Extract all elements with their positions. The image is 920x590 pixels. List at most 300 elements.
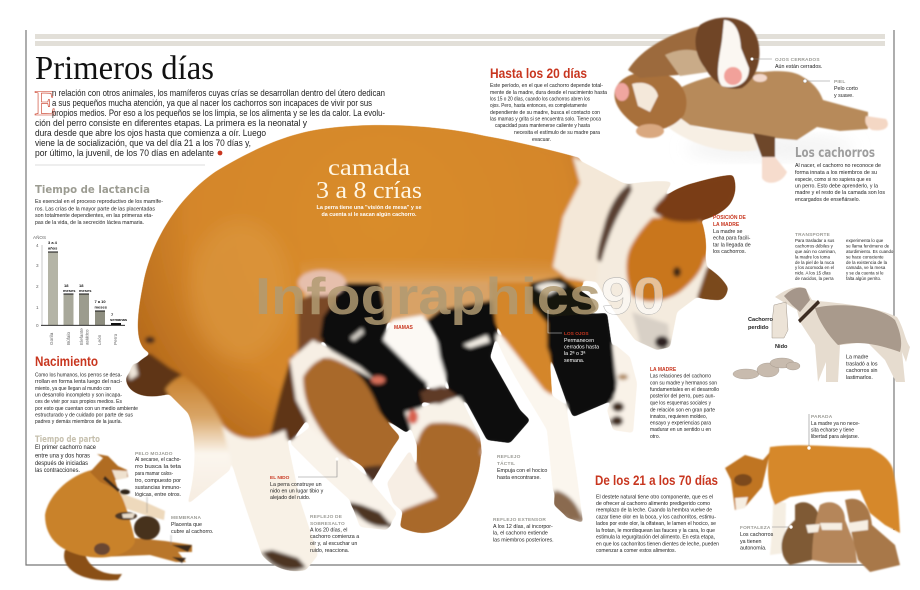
callout: parada: PARADA [811, 414, 833, 420]
end bullet [218, 151, 222, 155]
newborn pup [134, 516, 160, 540]
panel: los cachorros [795, 146, 885, 203]
text column 1: y los acomoda en el [795, 265, 834, 270]
left hind paw [262, 550, 306, 570]
bar chart: Gorila [49, 332, 54, 345]
description [650, 374, 719, 440]
description: forma innata a los miembros de su [795, 170, 877, 176]
description: son totalmente dependientes, en las primeras eta- [35, 213, 153, 219]
second pup [115, 512, 137, 520]
callout: los ojos: semana. [564, 358, 584, 364]
callout: reflejo de sobresalto: cachorro comienza a [310, 534, 359, 540]
description: necesita el estímulo de su madre para [514, 130, 600, 136]
bar chart: 3 [36, 263, 39, 268]
pale shoulder [665, 50, 708, 76]
description: ojos. Pero, hasta entonces, es completamente [490, 103, 587, 109]
text column 1: nido. A los 15 días [795, 270, 831, 276]
callout: reflejo tactil: REFLEJO [497, 454, 521, 460]
bar chart: 4 [36, 243, 39, 248]
text column 2 [846, 238, 894, 281]
body [45, 470, 135, 558]
illustration: two newborn puppies [614, 18, 888, 183]
description: cazar tiene olor en la boca, y los cachorritos, estimu- [596, 514, 716, 520]
description: por esto que cuentan con un medio ambiente [35, 406, 138, 412]
body [138, 125, 590, 443]
anal dark spot [145, 336, 155, 344]
bar chart: Búfalo [66, 332, 71, 345]
dark hip flank [270, 355, 310, 440]
front leg [112, 490, 165, 520]
description: encargados de enseñárselo. [795, 197, 860, 203]
collar [103, 476, 120, 492]
callout: piel: PIEL [834, 79, 845, 85]
callout: fortaleza [740, 525, 793, 552]
pink nose upper [724, 67, 742, 85]
eye [673, 267, 681, 277]
hind paw [865, 116, 888, 130]
description [35, 199, 163, 226]
callout: fortaleza: autonomía. [740, 546, 767, 552]
callout: reflejo tactil: hasta encontrarse. [497, 475, 541, 481]
intro paragraph: ción del perro consiste en diferentes etapas. La primera es la neonatal y [35, 117, 307, 128]
heading: Nacimiento [35, 353, 98, 369]
black puppy right head [530, 277, 597, 323]
callout: los ojos [548, 310, 599, 364]
white pup stripe [122, 513, 135, 518]
callout: posicion de la madre [713, 213, 751, 255]
bar chart: 7 a 10 [94, 299, 106, 304]
bar chart: 18 [79, 283, 84, 288]
description: las contracciones. [35, 467, 80, 474]
text column 1 [795, 238, 836, 281]
bar chart: meses [63, 288, 76, 293]
small paw [753, 74, 767, 82]
text column 2: falta algún perrito. [846, 276, 881, 281]
callout: pelo mojado: lógicas, entre otros. [135, 492, 181, 498]
black puppy right [547, 313, 617, 417]
bar chart: 7 [111, 312, 114, 317]
bar chart: 2 [36, 284, 39, 289]
callout: reflejo extensor: REFLEJO EXTENSOR [493, 517, 546, 523]
callout: reflejo de sobresalto: SOBRESALTO [310, 521, 345, 527]
red nose [408, 410, 418, 424]
text column 2: se hace consciente [846, 254, 884, 260]
callout: parada [807, 414, 860, 450]
description: Es esencial en el proceso reproductivo de los mamífe- [35, 199, 163, 205]
rear limb with white tuft [165, 370, 232, 505]
description: pas de la vida, de la secreción láctea mamaria. [35, 220, 144, 226]
description: un desarrollo incompleto y son incapa- [35, 392, 122, 398]
soft hip highlight [190, 220, 290, 360]
description: estructurado y de cuidado por parte de sus [35, 412, 133, 418]
dark head shade [734, 474, 752, 486]
callout: reflejo de sobresalto: ruido, reacciona. [310, 548, 349, 554]
text column 2: y se da cuenta si le [846, 270, 884, 276]
description: madre y el resto de la camada son los [795, 190, 885, 196]
callout: piel: y suave. [834, 93, 854, 99]
description: ces de vivir por sus propios medios. Es [35, 399, 122, 405]
heading: LA MADRE [650, 367, 677, 373]
description: Este período, en el que el cachorro depende total- [490, 83, 603, 89]
muzzle [735, 497, 748, 510]
callout: reflejo extensor: la, el cachorro extiende [493, 530, 548, 536]
description: miento, ya que llegan al mundo con [35, 386, 111, 392]
description: estimula la regurgitación del alimento. En esta etapa, [596, 534, 715, 540]
big number callout: camada: camada [328, 155, 410, 180]
front paw B [611, 402, 624, 426]
label: cachorro perdido: Cachorro [748, 317, 773, 323]
callout: posicion de la madre: POSICIÓN DE [713, 213, 746, 221]
description: El primer cachorro nace [35, 444, 96, 451]
intro paragraph: dura desde que abre los ojos hasta que comienza a oír. Luego [35, 127, 266, 138]
callout: reflejo de sobresalto: A los 20 días, el [310, 528, 347, 534]
tail [126, 345, 212, 396]
divider [35, 164, 205, 166]
gray dog silhouette [775, 287, 910, 382]
caption: cachorros sin [846, 368, 878, 374]
description: capacidad para mantenerse caliente y hasta [495, 123, 590, 129]
text column 1: de la piel de la nuca [795, 260, 835, 265]
callout: ojos cerrados: OJOS CERRADOS [775, 57, 820, 63]
callout: pelo mojado: rro busca la teta [135, 464, 181, 470]
callout: reflejo tactil: Empuja con el hocico [497, 468, 547, 474]
callout: los ojos: la 2ª o 3ª [564, 351, 585, 357]
bar chart: semanas [110, 317, 128, 322]
intro paragraph: n relación con otros animales, los mamíferos cuyas crías se desarrollan dentro del útero dedican [52, 87, 385, 98]
callout: los ojos: cerrados hasta [564, 344, 599, 350]
big number callout: camada: La perra tiene una "visión de mesa" y se [316, 205, 422, 211]
description: después de iniciadas [35, 460, 88, 467]
description: lados por este olor, la olfatean, le lamen el hocico, se [596, 521, 716, 527]
bar chart: asiático [84, 329, 90, 345]
tan fur behind pups [380, 283, 500, 323]
big number callout: camada [316, 155, 422, 218]
bar chart: años [48, 246, 58, 250]
description: con su madre y hermanos son [650, 380, 717, 386]
description: en que los cachorritos tienen dientes de leche, pueden [596, 542, 719, 548]
tail snout-like patch [129, 362, 138, 380]
upper ear [653, 175, 735, 222]
left white hind leg [222, 425, 318, 571]
callout: membrana: Placenta que [171, 522, 202, 528]
head [725, 452, 770, 510]
text column 1: la madre los toma [795, 254, 830, 260]
big number callout: camada: da cuenta si le sacan algún cachorro. [322, 212, 417, 218]
tail [64, 548, 122, 580]
dark leg [753, 133, 775, 157]
description: mente de la madre, dura desde el nacimiento hasta [490, 90, 607, 96]
callout: piel: Pelo corto [834, 86, 858, 92]
callout: posicion de la madre: echa para facili- [713, 236, 751, 242]
heading: TRANSPORTE [795, 232, 831, 238]
callout: el nido: alejado del ruido. [270, 495, 310, 501]
heading: Tiempo de parto [35, 435, 100, 445]
text column 2: camada, ve la mesa [846, 265, 886, 270]
callout: posicion de la madre: La madre se [713, 229, 742, 235]
pale belly [300, 251, 560, 300]
white foot [762, 157, 787, 183]
callout: el nido [270, 457, 339, 501]
pup right [845, 499, 900, 572]
intro paragraph: propios medios. Por eso a los pequeños se los limpia, se los alimenta y se les da calor. La evolu- [52, 107, 385, 118]
lower pup head [614, 72, 687, 130]
white forehead [535, 282, 565, 295]
callout: pelo mojado: sustancias inmuno- [135, 485, 181, 491]
bar chart: Elefante [79, 328, 84, 345]
text column 1: de nacidos, la perra [795, 276, 834, 281]
drop cap: E [34, 83, 56, 123]
description: otro. [650, 434, 660, 440]
pink paw [371, 376, 385, 384]
description: Como los humanos, los perros se desa- [35, 372, 122, 378]
description: las mamas y grita si se encuentra solo. Tiene poca [490, 116, 601, 122]
bar chart: 1 [36, 305, 39, 310]
body [768, 445, 900, 533]
collar [597, 184, 632, 262]
pink teat area [298, 270, 346, 296]
upper pup body [628, 25, 722, 78]
caption: trasladó a los [846, 362, 878, 368]
description: evacuar. [532, 137, 551, 143]
second front leg [607, 343, 637, 433]
description: la frotan, le mordisquean las fauces y la cara, lo que [596, 528, 715, 534]
callout: membrana [171, 515, 213, 535]
callout: membrana: cubre al cachorro. [171, 529, 213, 535]
label: cachorro perdido [748, 317, 773, 331]
callout: ojos cerrados [750, 57, 822, 70]
description: rrollan en forma lenta luego del naci- [35, 379, 122, 385]
intro paragraph: a sus pequeños mucha atención, ya que al nacer los cachorros son incapaces de vivir por sus [52, 97, 372, 108]
white stripe centre pup [463, 335, 490, 348]
callout: fortaleza: Los cachorros [740, 532, 774, 538]
title: Primeros días [35, 50, 214, 87]
description [35, 444, 96, 474]
big number callout: camada: 3 a 8 crías [316, 178, 422, 204]
description [795, 163, 885, 203]
bar chart: Perro [113, 333, 118, 345]
callout: pelo mojado: para mamar calos- [135, 471, 173, 477]
white chest bands [806, 520, 868, 533]
callout: reflejo extensor: A los 12 días, al incorpor- [493, 524, 553, 530]
text column 1: Para trasladar a sus [795, 238, 835, 243]
neck and head [90, 454, 128, 490]
bar chart: 3 a 4 [48, 240, 58, 245]
panel: tiempo de parto [35, 435, 100, 474]
dark fur behind left pup [298, 285, 338, 362]
callout: parada: sita echarse y tiene [811, 428, 854, 434]
callout: reflejo tactil [497, 454, 547, 481]
dark tail tip [363, 465, 382, 482]
panel: la madre [650, 367, 719, 440]
description: reemplazo de la leche. Cuando la hembra vuelve de [596, 508, 712, 514]
heading: De los 21 a los 70 días [595, 472, 718, 488]
callout: los ojos: Permanecen [564, 338, 594, 344]
callout: pelo mojado: Al secarse, el cacho- [135, 457, 181, 463]
label: cachorro perdido: perdido [748, 325, 769, 331]
description: madurar en un sentido u en [650, 427, 711, 433]
top header bars [35, 34, 885, 46]
taupe saddle [815, 305, 901, 352]
upper pup head [695, 18, 759, 89]
callout: posicion de la madre: LA MADRE [713, 222, 740, 228]
callout: fortaleza: FORTALEZA [740, 525, 771, 531]
second white hind leg [290, 427, 397, 530]
rear paws [172, 545, 192, 563]
text column 1: que aún no caminan, [795, 249, 836, 254]
callout: fortaleza: ya tienen [740, 539, 762, 545]
bar chart: León [97, 334, 102, 345]
callout: reflejo extensor [493, 517, 554, 544]
callout: parada: libertad para alejarse. [811, 434, 859, 440]
bar chart: meses [79, 288, 92, 293]
caption [846, 354, 878, 381]
description: ros. Las crías de la mayor parte de las placentadas [35, 206, 155, 212]
nose [655, 336, 669, 348]
shadow [685, 138, 855, 158]
description: entre una y dos horas [35, 452, 90, 460]
description [596, 494, 719, 554]
description: especie, como si no supiera que es [795, 177, 871, 183]
nest pups [733, 358, 800, 379]
bar chart: 0 [36, 323, 39, 328]
lower pup body [672, 71, 868, 140]
orange front leg [490, 282, 585, 395]
bar chart [33, 234, 128, 345]
callout: reflejo de sobresalto [310, 514, 359, 554]
callout: pelo mojado [135, 451, 181, 498]
description: Al nacer, el cachorro no reconoce de [795, 163, 881, 169]
head shade [784, 288, 810, 312]
pup middle [812, 502, 857, 563]
illustration: dog giving birth [45, 454, 192, 580]
description [35, 372, 138, 425]
black puppy centre [427, 300, 530, 443]
description: ensayo y experiencias para [650, 420, 711, 426]
callout: parada: La madre ya no nece- [811, 421, 860, 427]
lower pup white blaze [632, 83, 658, 112]
white belly between pups [383, 315, 445, 392]
description [490, 83, 607, 143]
callout: los ojos: LOS OJOS [564, 331, 589, 337]
panel: nacimiento [35, 353, 138, 425]
paw brown spot [618, 374, 628, 380]
panel: de los 21 a los 70 dias [595, 472, 719, 554]
text column 2: se llama fenómeno de [846, 244, 890, 248]
callout: ojos cerrados: Aún están cerrados. [775, 64, 822, 70]
heading: Los cachorros [795, 146, 875, 161]
white front leg [493, 330, 583, 523]
intro paragraph [34, 83, 385, 158]
bar chart: 18 [64, 283, 69, 288]
label: nido: Nido [775, 344, 788, 350]
intro paragraph: viene la de socialización, que va del día 21 a los 70 días y, [35, 137, 251, 148]
caption: La madre [846, 354, 868, 360]
text column 2: aturdimiento. Es cuando [846, 249, 894, 254]
illustration: mother dog nursing puppies [126, 125, 735, 571]
illustration: mother carrying pup [733, 287, 910, 382]
callout: reflejo extensor: las miembros posteriores. [493, 538, 554, 544]
description: posterior del perro, pues aun- [650, 394, 715, 400]
white blaze [718, 20, 749, 87]
white shoulder of bottom pup [405, 397, 482, 455]
hind legs [100, 535, 192, 562]
front leg [770, 500, 786, 555]
description: un perro. Esto debe aprenderlo, y la [795, 184, 878, 190]
description: comenzar a comer estos alimentos. [596, 548, 676, 554]
white muzzle [112, 470, 127, 480]
heading: Tiempo de lactancia [35, 183, 150, 196]
callout: reflejo de sobresalto: oír y, al escuchar un [310, 541, 357, 547]
callout: el nido: nido en un lugar tibio y [270, 488, 324, 494]
panel: hasta los 20 dias [490, 65, 607, 143]
panel: transporte [733, 232, 910, 382]
pink nose lower [615, 83, 629, 101]
description: de ofrecer al cachorro alimento predigerido como [596, 501, 710, 507]
panel: tiempo de lactancia [33, 183, 163, 345]
callout: posicion de la madre: los cachorros. [713, 249, 746, 255]
watermark: Infographics 90 [255, 268, 665, 326]
text column 1: cachorros débiles y [795, 244, 834, 248]
description: los 15 o 20 días, cuando los cachorros abren los [490, 96, 590, 102]
description: fundamentales en el desarrollo [650, 387, 719, 393]
description: Las relaciones del cachorro [650, 374, 711, 380]
lower ear [697, 267, 728, 300]
forepaw lower [636, 124, 664, 138]
callout: reflejo tactil: TÁCTIL [497, 460, 515, 467]
small dark head [420, 386, 457, 404]
bar chart: AÑOS [33, 234, 46, 240]
forepaw [120, 489, 130, 495]
heading: Hasta los 20 días [490, 65, 587, 81]
callout dots and leader lines [147, 497, 171, 545]
white belly of lower pup [660, 108, 757, 151]
text column 2: de la existencia de la [846, 260, 888, 265]
black puppy left [320, 283, 427, 433]
white patch on bottom pup [387, 450, 437, 512]
callout: el nido: EL NIDO [270, 475, 290, 481]
bar chart: meses [94, 304, 108, 310]
description: El destete natural tiene otro componente, que es el [596, 494, 713, 500]
white collar of left pup [290, 340, 375, 453]
grey snout shade [632, 312, 670, 350]
callout: pelo mojado: PELO MOJADO [135, 451, 173, 457]
callout: posicion de la madre: tar la llegada de [713, 242, 751, 248]
carried pup [772, 302, 788, 338]
dark underbelly [94, 543, 110, 555]
brown puppy left [303, 358, 400, 480]
description: de relación son en gran parte [650, 408, 715, 414]
intro paragraph: por último, la juvenil, de los 70 días en adelante [35, 147, 214, 158]
illustration: standing dog with puppies [725, 445, 900, 572]
callout: membrana: MEMBRANA [171, 515, 201, 521]
label: mamas: MAMAS [394, 325, 414, 331]
pup left [782, 502, 820, 565]
second hind paw [350, 502, 392, 527]
front paw A [554, 490, 583, 522]
orange face [626, 217, 706, 301]
caption: lastimarlos. [846, 375, 873, 381]
callout: piel [803, 79, 858, 99]
description: padres y demás miembros de la jauría. [35, 419, 122, 425]
callout: reflejo de sobresalto: REFLEJO DE [310, 514, 343, 520]
head white base [597, 181, 707, 350]
callout: el nido: La perra construye un [270, 482, 322, 488]
callout: pelo mojado: tro, compuesto por [135, 478, 181, 484]
white stripe left pup [350, 328, 364, 341]
brown puppy bottom [400, 423, 481, 533]
description: innatos, requieren moldeo, [650, 414, 707, 420]
collar [798, 300, 820, 323]
